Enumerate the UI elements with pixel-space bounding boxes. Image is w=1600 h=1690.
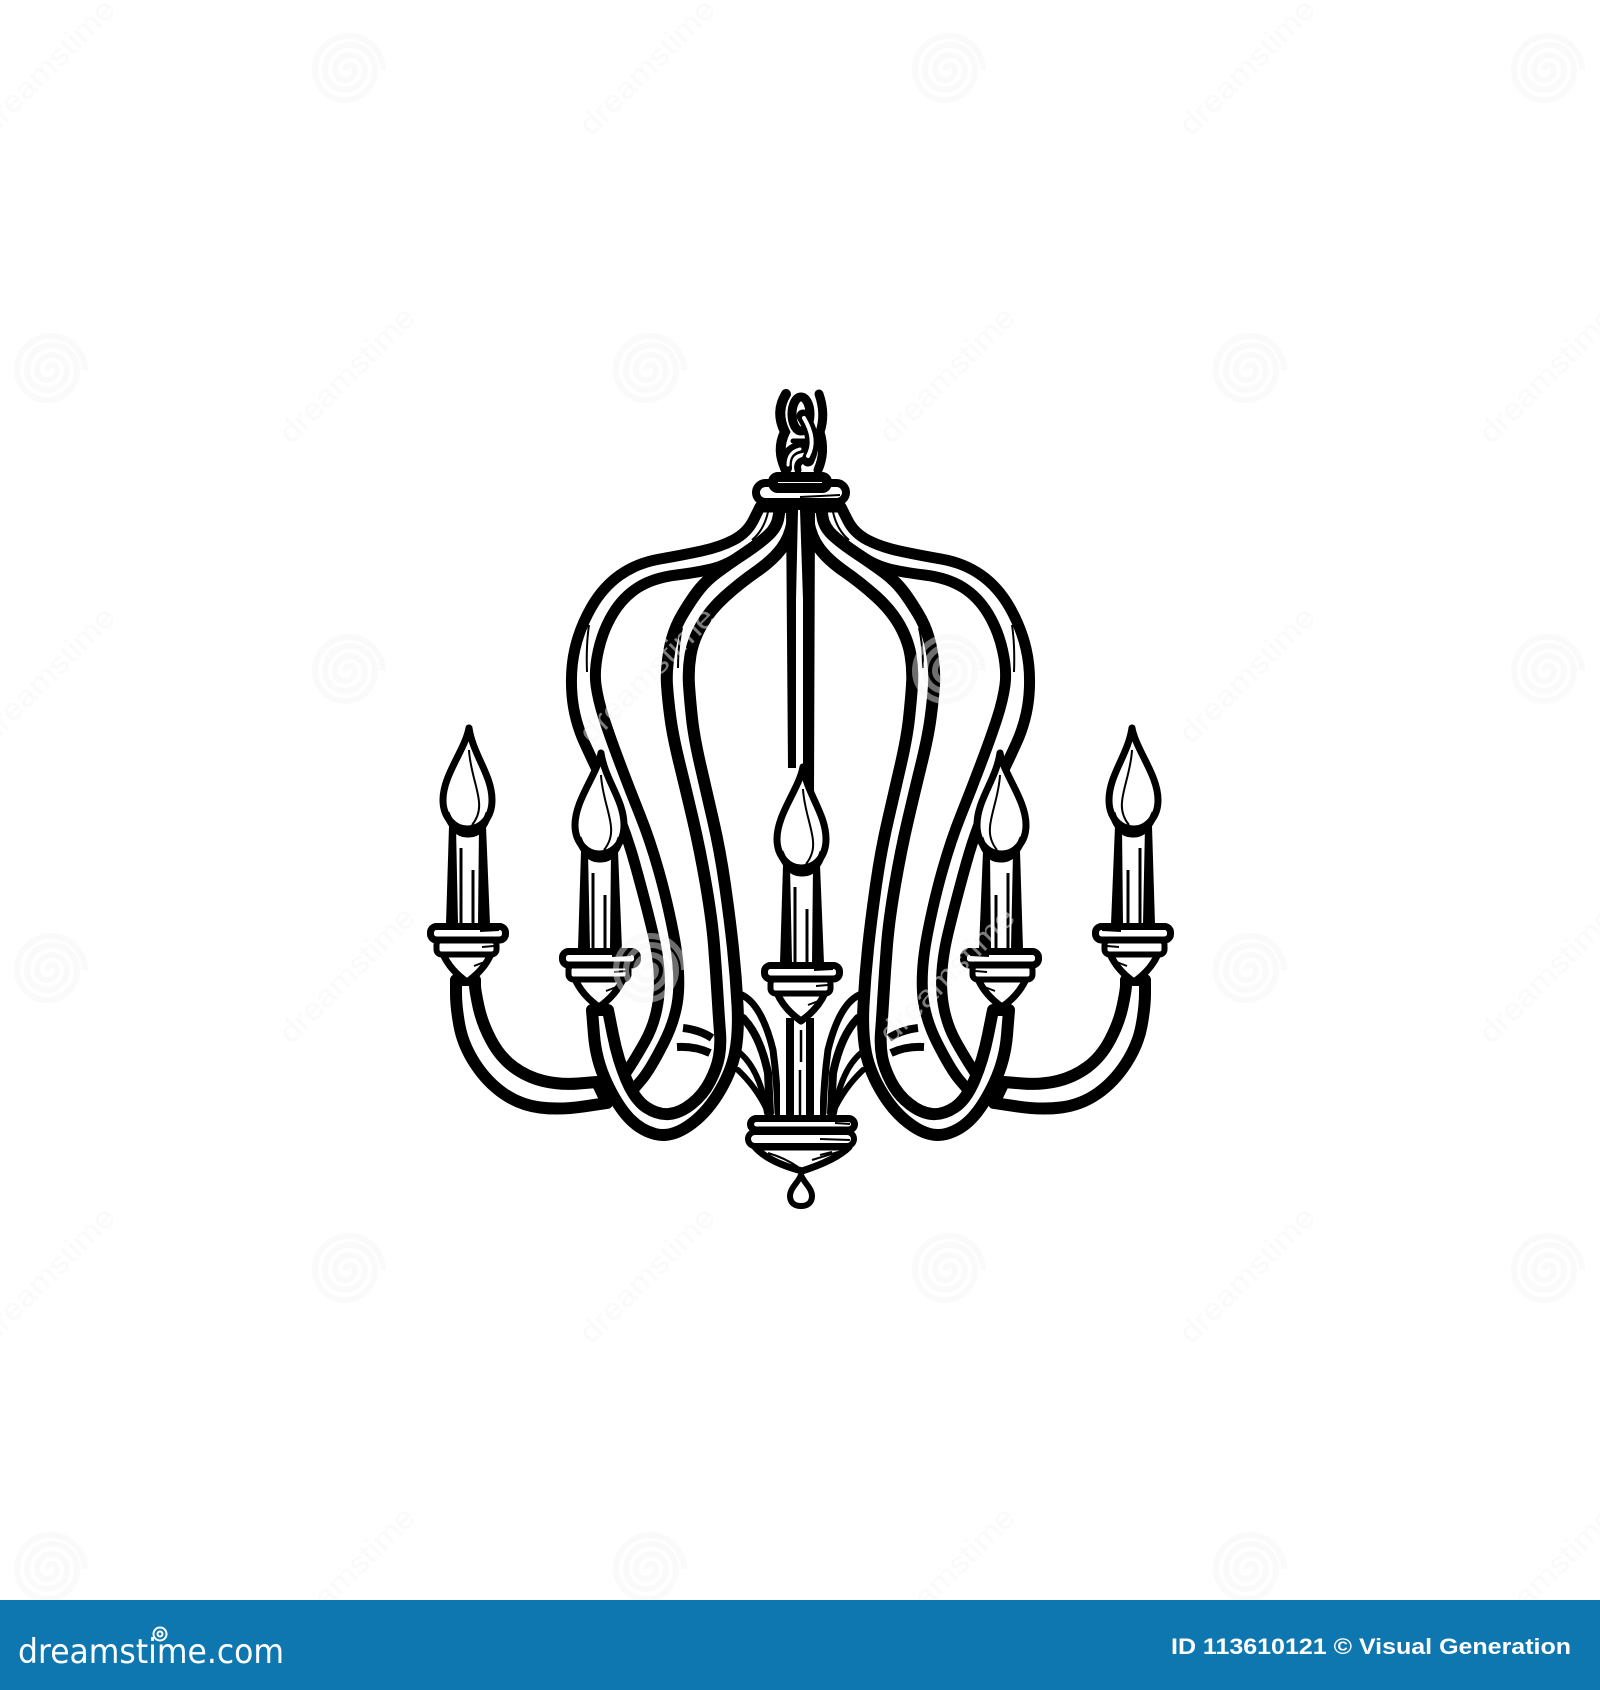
left half of chandelier <box>430 507 795 1135</box>
ceiling ring <box>756 477 846 502</box>
footer spiral logo <box>154 1628 166 1640</box>
watermark words: dreamstime <box>1173 1201 1322 1350</box>
bottom bowl <box>748 1118 854 1171</box>
outer candle <box>430 728 506 982</box>
inner arch sweeping to second candle <box>592 507 795 1135</box>
watermark words: dreamstime <box>873 301 1022 450</box>
connecting bracket <box>677 1028 712 1053</box>
watermark words: dreamstime <box>273 901 422 1050</box>
watermark words: dreamstime <box>1173 601 1322 750</box>
watermark words: dreamstime <box>573 1201 722 1350</box>
centre candle <box>764 767 840 1021</box>
watermark words: dreamstime <box>1173 0 1322 142</box>
hanging drop <box>790 1175 812 1206</box>
central rod <box>786 505 815 795</box>
sketch highlights <box>587 512 768 1098</box>
chain <box>780 394 823 470</box>
footer bar <box>0 1600 1600 1690</box>
right half of chandelier <box>806 507 1170 1135</box>
watermark words: dreamstime <box>573 0 722 142</box>
outer arch band <box>571 507 782 1090</box>
watermark words: dreamstime <box>273 1501 422 1650</box>
footer brand name: dreamstime.com <box>18 1632 284 1672</box>
central stem <box>780 1018 820 1118</box>
flanking curved stems <box>738 995 778 1113</box>
image id and credit: ID 113610121 © Visual Generation <box>1171 1634 1571 1659</box>
second candle <box>562 753 638 1007</box>
watermark words: dreamstime <box>273 301 422 450</box>
watermark words: dreamstime <box>873 1501 1022 1650</box>
outer candle arm <box>456 980 607 1109</box>
chandelier illustration <box>430 394 1170 1206</box>
watermark words: dreamstime <box>573 601 722 750</box>
watermark words: dreamstime <box>873 901 1022 1050</box>
